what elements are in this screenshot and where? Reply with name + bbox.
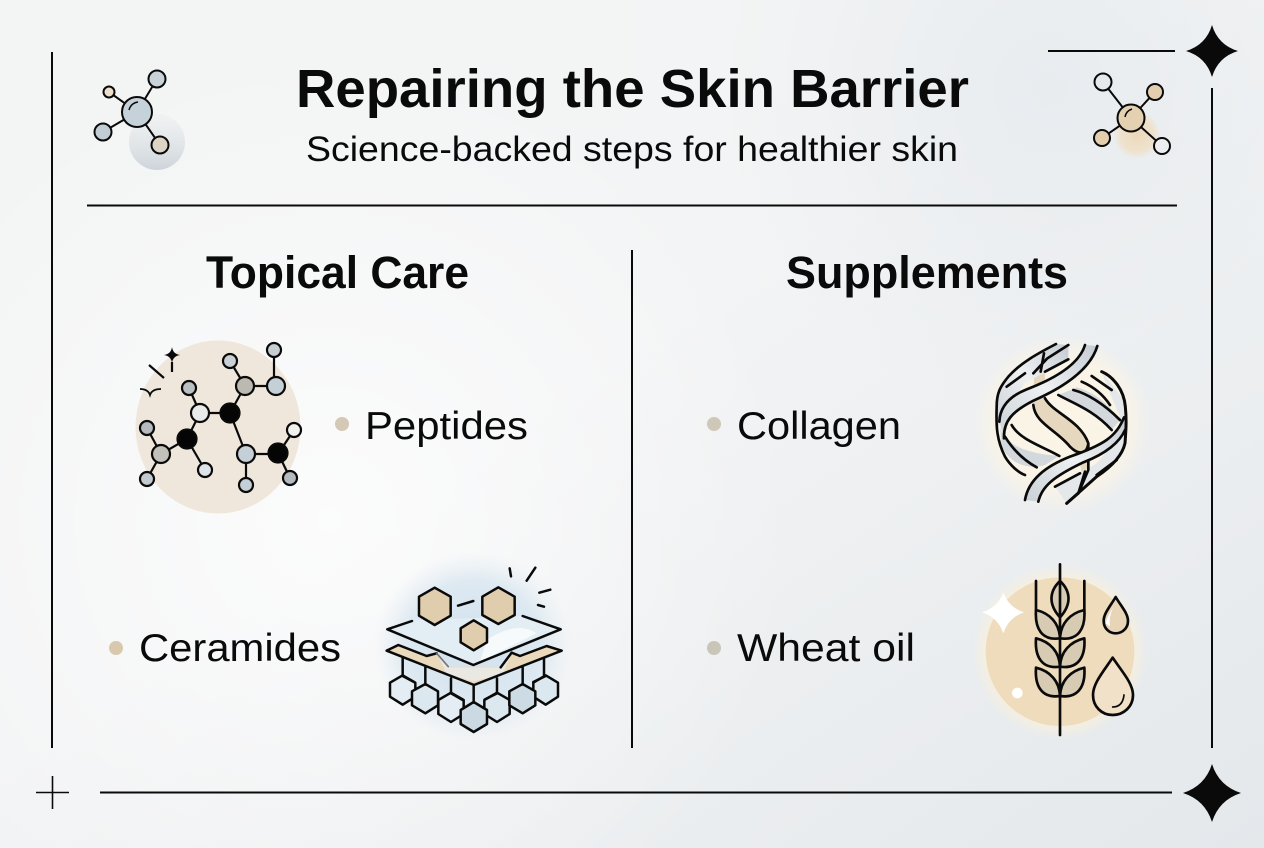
label: peptides: Peptides bbox=[365, 405, 528, 448]
icon: molecule top left bbox=[94, 70, 185, 170]
bullet: peptides bbox=[335, 417, 349, 431]
icon: ceramides skin layers bbox=[373, 552, 573, 742]
beige core bbox=[1033, 353, 1089, 490]
label: ceramides: Ceramides bbox=[139, 627, 341, 670]
outer right ribbon bbox=[1055, 372, 1125, 503]
icon: peptides molecule bbox=[136, 340, 301, 514]
title: Repairing the Skin Barrier bbox=[296, 59, 969, 119]
icon: wheat and oil drops bbox=[973, 564, 1147, 739]
icon: bottom right star bbox=[1183, 764, 1241, 822]
heading: topical care: Topical Care bbox=[206, 247, 469, 298]
label: collagen: Collagen bbox=[737, 405, 901, 448]
label: wheat oil: Wheat oil bbox=[737, 627, 915, 670]
back band left bbox=[1000, 427, 1059, 467]
panel: topical care bbox=[109, 247, 573, 742]
panel: supplements bbox=[707, 247, 1150, 739]
front ribbon A fill and edges bbox=[999, 345, 1097, 438]
back band right bbox=[1058, 387, 1120, 430]
back ribbon top left bbox=[997, 344, 1068, 427]
icon: top right star bbox=[1186, 25, 1238, 77]
heading: supplements: Supplements bbox=[786, 247, 1068, 298]
bullet: collagen bbox=[707, 417, 721, 431]
bullet: wheat oil bbox=[707, 641, 721, 655]
icon: molecule top right bbox=[1094, 74, 1170, 159]
subtitle: Science-backed steps for healthier skin bbox=[306, 130, 958, 169]
front ribbon B fill and edges bbox=[1025, 417, 1125, 502]
icon: collagen strands bbox=[973, 335, 1150, 512]
bullet: ceramides bbox=[109, 641, 123, 655]
